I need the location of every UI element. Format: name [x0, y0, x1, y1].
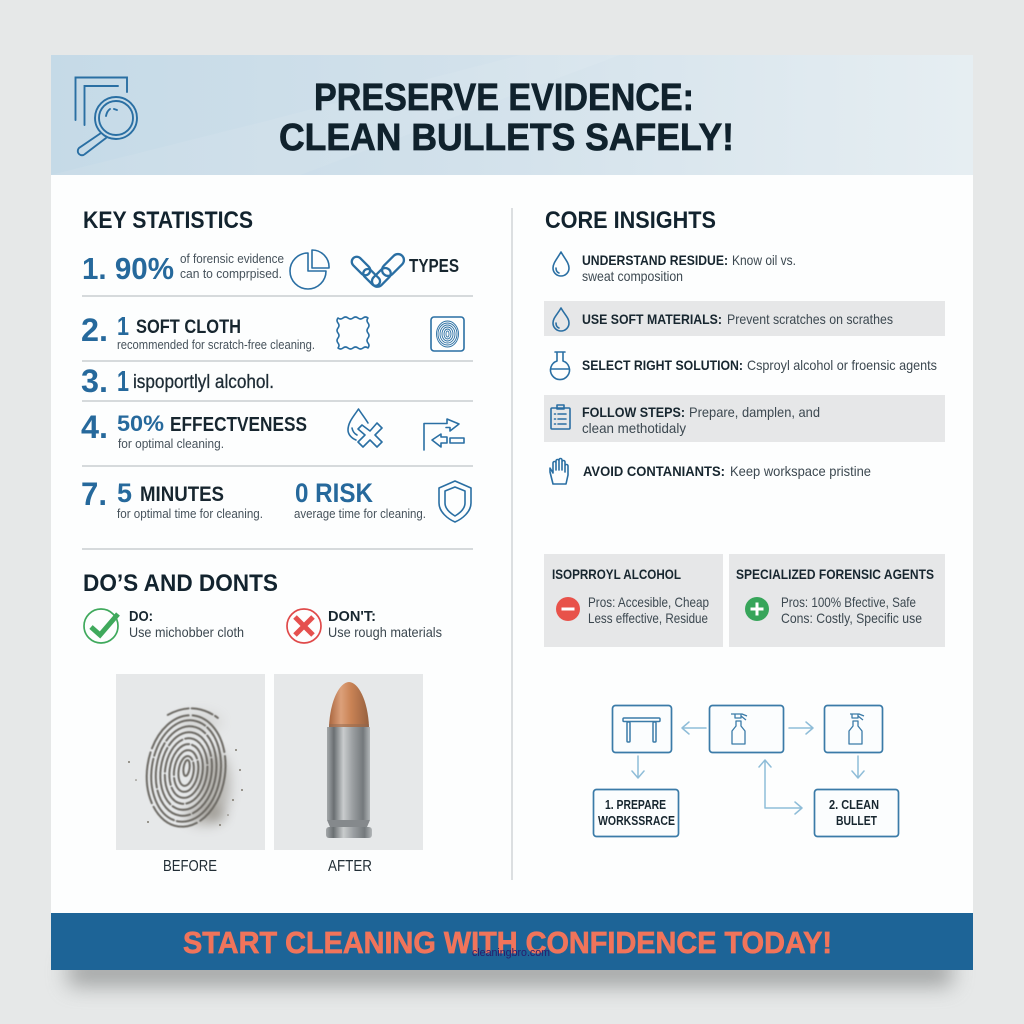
stat 7: for optimal time for cleaning.: [117, 506, 263, 521]
insight: understand residue: Know oil vs.: [732, 252, 796, 268]
stat: zero risk: average time for cleaning.: [294, 506, 426, 521]
icon: cloth: [337, 317, 369, 349]
stat 2: 2.: [81, 312, 108, 348]
node: prepare workspace: [594, 790, 678, 836]
title: PRESERVE EVIDENCE:: [314, 77, 694, 119]
insight: follow steps: clean methotidaly: [582, 420, 686, 436]
icon: drop: [553, 252, 569, 276]
pros and cons text: Less effective, Residue: [588, 610, 708, 626]
pros and cons text: [588, 594, 709, 626]
insight: follow steps: FOLLOW STEPS:: [582, 404, 685, 420]
panel: key statistics: [81, 207, 473, 550]
arrow: to bottle: [789, 722, 813, 734]
pros and cons text: Pros: 100% Bfective, Safe: [781, 594, 916, 610]
stat 4: EFFECTVENESS: [170, 414, 307, 436]
node: spray bottle: [824, 706, 882, 752]
stat: zero risk: [294, 478, 426, 521]
stat 2: [81, 311, 315, 352]
icon: chain links: [350, 252, 406, 289]
arrow: to clean: [852, 756, 864, 778]
pros and cons text: [781, 594, 922, 626]
insight: follow steps: Prepare, damplen, and: [689, 404, 820, 420]
stat 7: 5: [117, 478, 132, 508]
pros and cons text: Cons: Costly, Specific use: [781, 610, 922, 626]
icon: plus: [745, 597, 769, 621]
icon: clipboard: [551, 405, 570, 429]
icon: magnifying glass: [76, 78, 137, 155]
stat 7: 7.: [81, 476, 107, 512]
flowchart: [594, 706, 898, 836]
stat 3: 3.: [81, 363, 108, 399]
footer banner: [51, 913, 973, 970]
stat 3: ispoportlyl alcohol.: [133, 372, 274, 393]
caption: before: BEFORE: [163, 858, 217, 875]
insight: soft materials: [582, 311, 893, 327]
stat 4: [81, 409, 307, 451]
do text: DO:: [129, 608, 153, 625]
pros and cons text: Pros: Accesible, Cheap: [588, 594, 709, 610]
stat 1: 1. 90%: [82, 251, 174, 286]
node: spray bottle: [710, 706, 784, 752]
node: clean bullet: [814, 790, 898, 836]
insight: understand residue: [582, 252, 796, 284]
header banner: [51, 55, 973, 175]
icon: pie chart: [290, 250, 329, 289]
panel: specialized forensic agents: [729, 554, 945, 647]
insight: select right solution: Csproyl alcohol or froensic agents: [747, 357, 937, 373]
icon: minus: [556, 597, 580, 621]
stat 2: recommended for scratch-free cleaning.: [117, 337, 315, 352]
stat 1: of forensic evidence: [180, 251, 284, 266]
label: types: TYPES: [409, 255, 459, 276]
stat 4: 50%: [117, 411, 164, 436]
do text: Use michobber cloth: [129, 624, 244, 640]
title: [279, 77, 734, 159]
don't text: [328, 608, 442, 640]
insight: avoid contaminants: Keep workspace pristine: [730, 463, 871, 479]
arrow: to prepare: [632, 756, 644, 778]
don't text: Use rough materials: [328, 624, 442, 640]
insight: avoid contaminants: AVOID CONTANIANTS:: [583, 463, 725, 479]
image: clean bullet after: [274, 674, 423, 850]
node: prepare workspace: 1. PREPARE: [605, 798, 666, 812]
icon: flask: [550, 352, 570, 380]
band: follow steps: [544, 395, 945, 442]
arrow: elbow connector: [759, 760, 802, 814]
node: clean bullet: BULLET: [836, 814, 877, 828]
don't text: DON'T:: [328, 608, 376, 625]
insight: avoid contaminants: [583, 463, 871, 479]
stat 4: for optimal cleaning.: [118, 436, 224, 451]
stat 3: 1: [117, 366, 129, 398]
watermark: cleaningbro.com: [472, 947, 550, 959]
node: clean bullet: 2. CLEAN: [829, 798, 879, 812]
image: fingerprint before: [116, 674, 265, 850]
icon: direction arrows: [424, 419, 464, 450]
insight: select right solution: SELECT RIGHT SOLUTION:: [582, 357, 743, 373]
do text: [129, 608, 244, 640]
icon: green check: [84, 609, 118, 643]
stat 2: 1: [117, 311, 129, 341]
panel: core insights: [544, 207, 945, 484]
stat 2: SOFT CLOTH: [136, 317, 241, 338]
stat 1: [82, 251, 284, 286]
panel: isopropyl alcohol: [544, 554, 723, 647]
insight: understand residue: UNDERSTAND RESIDUE:: [582, 252, 728, 268]
card shadow: [68, 958, 952, 986]
heading: do's and don'ts: DO’S AND DONTS: [83, 570, 278, 597]
band: soft materials: [544, 301, 945, 336]
stat 7: MINUTES: [140, 483, 224, 506]
insight: follow steps: [582, 404, 820, 436]
node: table: [612, 706, 672, 752]
insight: soft materials: Prevent scratches on scrathes: [727, 311, 893, 327]
node: prepare workspace: WORKSSRACE: [598, 814, 675, 828]
icon: shield: [439, 481, 471, 522]
stat 4: 4.: [81, 409, 108, 445]
icon: hand: [550, 459, 568, 484]
heading: specialized forensic agents: SPECIALIZED FORENSIC AGENTS: [736, 566, 934, 582]
stat 7: [81, 476, 263, 521]
insight: understand residue: sweat composition: [582, 268, 683, 284]
heading: key statistics: KEY STATISTICS: [83, 207, 253, 234]
caption: after: AFTER: [328, 858, 372, 875]
icon: fingerprint box: [431, 317, 464, 351]
insight: select right solution: [582, 357, 937, 373]
heading: isopropyl alcohol: ISOPRROYL ALCOHOL: [552, 566, 681, 582]
icon: drop: [553, 308, 569, 331]
icon: red cross: [287, 609, 321, 643]
insight: soft materials: USE SOFT MATERIALS:: [582, 311, 722, 327]
stat: zero risk: 0 RISK: [295, 478, 373, 508]
icon: drop with cross: [348, 409, 382, 447]
panel: do's and don'ts: [83, 570, 442, 875]
stat 3: [81, 363, 274, 399]
title: CLEAN BULLETS SAFELY!: [279, 117, 734, 159]
call to action: START CLEANING WITH CONFIDENCE TODAY!: [183, 925, 832, 960]
arrow: to table: [682, 722, 706, 734]
heading: core insights: CORE INSIGHTS: [545, 207, 716, 234]
stat 1: can to comprpised.: [180, 266, 282, 281]
column divider: [511, 208, 513, 880]
